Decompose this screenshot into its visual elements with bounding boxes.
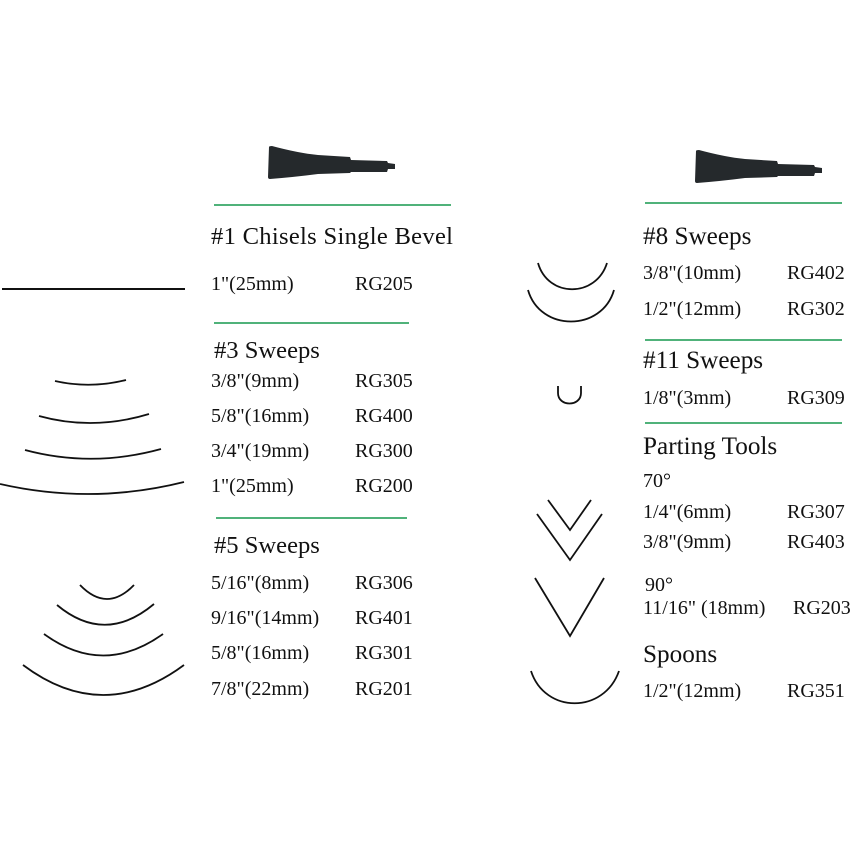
row: 1 inch RG205: RG205 (355, 273, 413, 295)
section: #3 sweeps (0, 323, 413, 497)
profile: spoon curve (531, 671, 619, 703)
row: RG402 (643, 262, 845, 284)
heading: #1 Chisels Single Bevel: #1 Chisels Single Bevel (211, 223, 453, 250)
row: RG200: RG200 (355, 475, 413, 497)
row: 1 inch RG205 (211, 273, 413, 295)
row: RG309: 1/8"(3mm) (643, 387, 731, 409)
section: #1 chisels (2, 205, 453, 295)
row: RG203 (643, 597, 850, 619)
heading: #3 Sweeps: #3 Sweeps (214, 337, 320, 364)
row: RG306: RG306 (355, 572, 413, 594)
row: RG307 (643, 501, 845, 523)
row: RG200: 1"(25mm) (211, 475, 294, 497)
icon: left tool handle (268, 146, 395, 179)
row: RG351: RG351 (787, 680, 845, 702)
icon: right tool handle (695, 150, 822, 183)
section: spoons (531, 641, 845, 703)
heading: Parting Tools: Parting Tools (643, 433, 777, 460)
row: RG403: RG403 (787, 531, 845, 553)
heading: Spoons: Spoons (643, 641, 717, 668)
row: RG401: 9/16"(14mm) (211, 607, 319, 629)
profile: flat chisel (2, 288, 185, 290)
heading: #5 Sweeps: #5 Sweeps (214, 532, 320, 559)
row: RG307: RG307 (787, 501, 845, 523)
profiles: V parting tools (535, 500, 604, 636)
row: RG305 (211, 370, 413, 392)
row: RG302: RG302 (787, 298, 845, 320)
row: RG400 (211, 405, 413, 427)
row: RG305: RG305 (355, 370, 413, 392)
row: RG401: RG401 (355, 607, 413, 629)
row: RG351: 1/2"(12mm) (643, 680, 741, 702)
row: RG203: RG203 (793, 597, 850, 619)
row: RG305: 3/8"(9mm) (211, 370, 299, 392)
row: RG300 (211, 440, 413, 462)
heading: #11 Sweeps: #11 Sweeps (643, 347, 763, 374)
row: RG302 (643, 298, 845, 320)
row: RG201: RG201 (355, 678, 413, 700)
section: #11 sweeps (558, 340, 845, 409)
row: RG307: 1/4"(6mm) (643, 501, 731, 523)
row: RG403: 3/8"(9mm) (643, 531, 731, 553)
row: RG400: 5/8"(16mm) (211, 405, 309, 427)
profile: #11 U curve (558, 386, 581, 404)
row: RG309 (643, 387, 845, 409)
row: RG302: 1/2"(12mm) (643, 298, 741, 320)
profiles: #5 sweep curves (23, 585, 184, 695)
row: RG201 (211, 678, 413, 700)
label: 70 degrees: 70° (643, 470, 671, 492)
row: RG203: 11/16" (18mm) (643, 597, 765, 619)
row: RG351 (643, 680, 845, 702)
row: RG200 (211, 475, 413, 497)
row: RG400: RG400 (355, 405, 413, 427)
section: #5 sweeps (23, 518, 413, 700)
heading: #8 Sweeps: #8 Sweeps (643, 223, 751, 250)
row: 1 inch RG205: 1"(25mm) (211, 273, 294, 295)
profiles: #3 sweep curves (0, 380, 184, 494)
row: RG201: 7/8"(22mm) (211, 678, 309, 700)
section: parting tools (535, 423, 850, 636)
section: #8 sweeps (528, 203, 845, 322)
label: 90 degrees: 90° (645, 574, 673, 596)
row: RG401 (211, 607, 413, 629)
row: RG402: 3/8"(10mm) (643, 262, 741, 284)
row: RG300: 3/4"(19mm) (211, 440, 309, 462)
profiles: #8 sweep curves (528, 263, 614, 322)
row: RG301: 5/8"(16mm) (211, 642, 309, 664)
row: RG301 (211, 642, 413, 664)
row: RG306 (211, 572, 413, 594)
row: RG402: RG402 (787, 262, 845, 284)
row: RG306: 5/16"(8mm) (211, 572, 309, 594)
row: RG309: RG309 (787, 387, 845, 409)
row: RG403 (643, 531, 845, 553)
row: RG300: RG300 (355, 440, 413, 462)
row: RG301: RG301 (355, 642, 413, 664)
